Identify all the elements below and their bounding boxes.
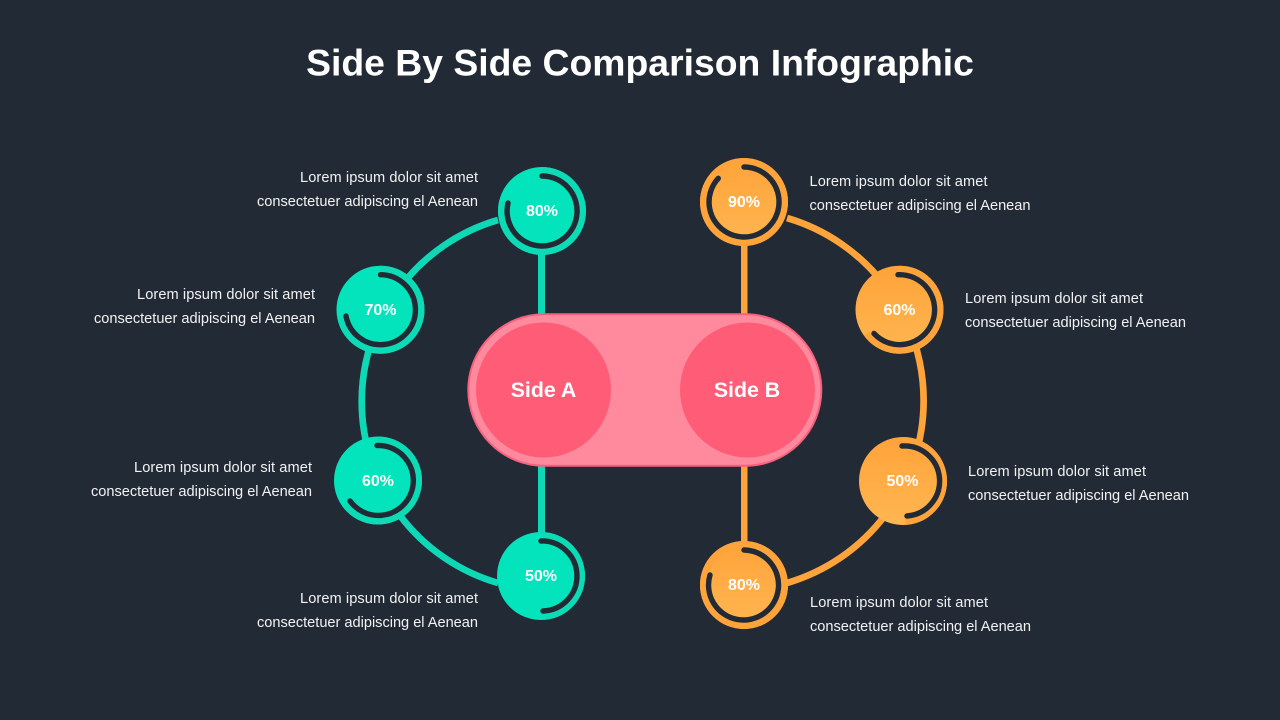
- text block: side B 80% description: Lorem ipsum dolor sit amet: [810, 595, 988, 611]
- panel: side B branch: [700, 158, 1189, 635]
- node: side A 60%: 60%: [362, 473, 394, 490]
- text block: side B 90% description: consectetuer adipiscing el Aenean: [810, 198, 1030, 214]
- text block: side A 80% description: consectetuer adipiscing el Aenean: [257, 194, 478, 210]
- node: side B 80%: 80%: [728, 577, 760, 594]
- connector: side B bottom stem: [741, 460, 748, 545]
- connector: side B top stem: [741, 240, 748, 320]
- node: side B 80%: [700, 541, 788, 629]
- node: side B 90%: [700, 158, 788, 246]
- panel: central comparison pill: [468, 314, 821, 466]
- side A badge: Side A: [511, 378, 576, 402]
- text block: side B 60% description: [965, 291, 1186, 331]
- node: side B 90%: 90%: [728, 194, 760, 211]
- connector: side A top stem: [538, 250, 545, 320]
- node: side B 50%: [859, 437, 947, 525]
- connector: side A bottom stem: [538, 460, 545, 540]
- node: side A 70%: 70%: [364, 302, 397, 319]
- node: side A 50%: 50%: [525, 568, 557, 585]
- text block: side A 70% description: Lorem ipsum dolor sit amet: [137, 287, 315, 303]
- text block: side B 80% description: consectetuer adipiscing el Aenean: [810, 619, 1031, 635]
- side B badge: Side B: [714, 378, 780, 402]
- node: side A 60%: [334, 436, 422, 524]
- node: side A 50%: [497, 532, 585, 620]
- node: side B 50%: 50%: [886, 473, 919, 490]
- text block: side B 60% description: Lorem ipsum dolor sit amet: [965, 291, 1143, 307]
- text block: side B 50% description: consectetuer adipiscing el Aenean: [968, 488, 1189, 504]
- node: side B 60%: 60%: [883, 302, 916, 319]
- text block: side B 90% description: Lorem ipsum dolor sit amet: [810, 174, 988, 190]
- node: side A 70%: [336, 266, 424, 354]
- text block: side B 50% description: [968, 464, 1189, 504]
- text block: side A 70% description: consectetuer adipiscing el Aenean: [94, 311, 315, 327]
- side A badge: [476, 322, 611, 458]
- node: side A 80%: 80%: [526, 203, 558, 220]
- text block: side B 60% description: consectetuer adipiscing el Aenean: [965, 315, 1186, 331]
- text block: side A 50% description: consectetuer adipiscing el Aenean: [257, 615, 478, 631]
- text block: side A 60% description: Lorem ipsum dolor sit amet: [134, 460, 312, 476]
- side B badge: [680, 322, 815, 458]
- panel: side A branch: [91, 167, 586, 631]
- node: side A 80%: [498, 167, 586, 255]
- text block: side A 60% description: consectetuer adipiscing el Aenean: [91, 484, 312, 500]
- connector: side A arc: [362, 220, 498, 583]
- text block: side A 60% description: [91, 460, 312, 500]
- node: side B 60%: [856, 266, 944, 354]
- text block: side B 80% description: [810, 595, 1031, 635]
- text block: side B 90% description: [810, 174, 1030, 214]
- text block: side A 70% description: [94, 287, 315, 327]
- text block: side A 50% description: [257, 591, 478, 631]
- connector: side B arc: [787, 218, 924, 583]
- pill background: [468, 314, 821, 466]
- text block: side A 80% description: Lorem ipsum dolor sit amet: [300, 170, 478, 186]
- text block: side B 50% description: Lorem ipsum dolor sit amet: [968, 464, 1146, 480]
- text block: side A 50% description: Lorem ipsum dolor sit amet: [300, 591, 478, 607]
- title: Side By Side Comparison Infographic: [306, 42, 974, 84]
- text block: side A 80% description: [257, 170, 478, 210]
